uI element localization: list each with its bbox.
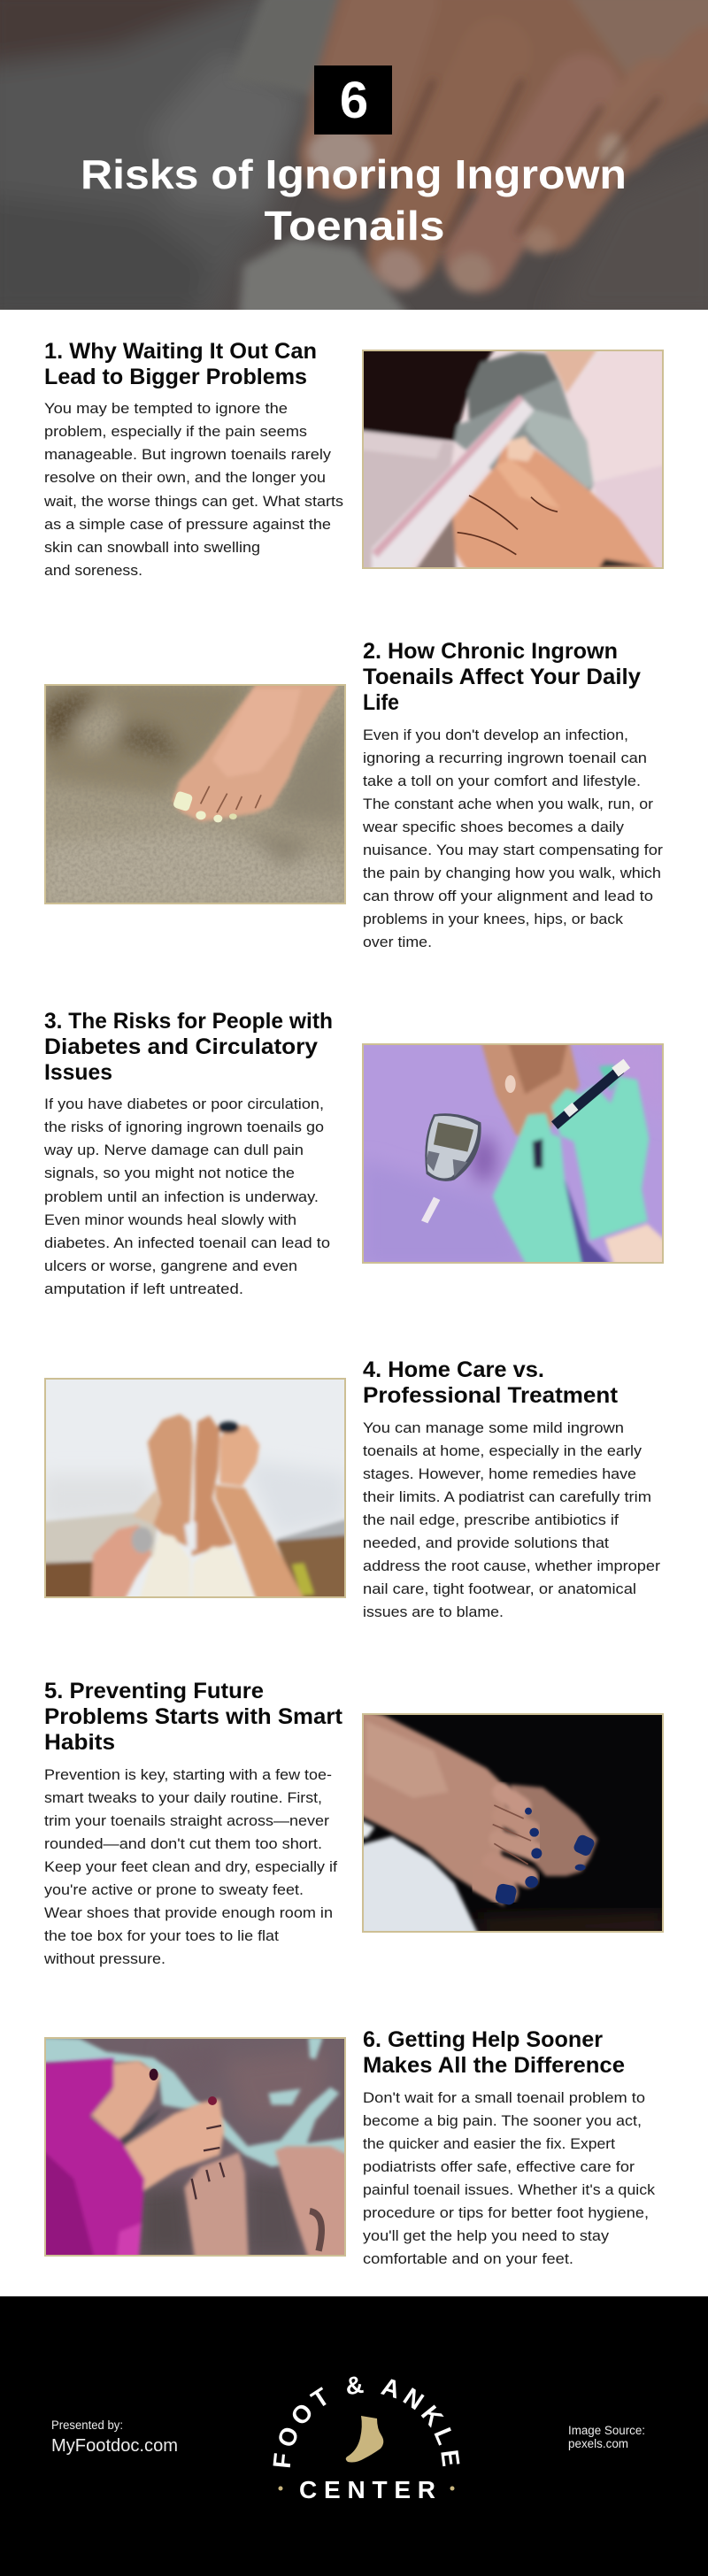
- heading 2: [363, 639, 641, 715]
- heading 5: Habits: [44, 1730, 115, 1755]
- text block 4: You can manage some mild ingrown: [363, 1420, 624, 1436]
- text block 4: [363, 1420, 661, 1620]
- text block 6: painful toenail issues. Whether it's a quick: [363, 2182, 656, 2198]
- heading 3: Diabetes and Circulatory: [44, 1034, 318, 1059]
- heading 6: [363, 2027, 625, 2078]
- text block 2: nuisance. You may start compensating for: [363, 842, 664, 858]
- photo: foot on sand: [44, 684, 346, 904]
- text block 5: rounded—and don't cut them too short.: [44, 1836, 322, 1852]
- title: [81, 151, 627, 249]
- heading 1: 1. Why Waiting It Out Can: [44, 339, 317, 364]
- text block 4: address the root cause, whether improper: [363, 1558, 661, 1574]
- text block 1: skin can snowball into swelling: [44, 540, 260, 556]
- presented by: MyFootdoc.com: [51, 2436, 178, 2456]
- text block 2: over time.: [363, 934, 432, 950]
- text block 1: problem, especially if the pain seems: [44, 424, 307, 440]
- panel: section 1: [43, 339, 666, 579]
- panel: section 6: [42, 2027, 656, 2267]
- text block 3: signals, so you might not notice the: [44, 1165, 295, 1181]
- text block 4: issues are to blame.: [363, 1604, 504, 1620]
- heading 6: 6. Getting Help Sooner: [363, 2027, 603, 2052]
- text block 3: way up. Nerve damage can dull pain: [43, 1142, 304, 1158]
- text block 6: become a big pain. The sooner you act,: [363, 2113, 642, 2129]
- photo: glucose meter and gloved hands: [362, 1043, 664, 1264]
- heading 5: [44, 1679, 343, 1755]
- text block 6: Don't wait for a small toenail problem to: [363, 2090, 645, 2106]
- text block 1: resolve on their own, and the longer you: [44, 470, 326, 486]
- presented by: Presented by:: [51, 2418, 123, 2432]
- text block 5: Keep your feet clean and dry, especially if: [44, 1859, 337, 1875]
- heading 4: Professional Treatment: [363, 1383, 619, 1408]
- logo: FOOT & ANKLE: [273, 2377, 460, 2467]
- text block 2: take a toll on your comfort and lifestyle.: [363, 773, 641, 789]
- panel: section 4: [42, 1357, 661, 1620]
- text block 2: problems in your knees, hips, or back: [363, 911, 624, 927]
- number badge: [314, 65, 392, 135]
- text block 6: podiatrists offer safe, effective care for: [363, 2159, 635, 2175]
- text block 3: diabetes. An infected toenail can lead to: [44, 1235, 330, 1251]
- text block 4: needed, and provide solutions that: [363, 1535, 609, 1551]
- image source: Image Source:: [568, 2424, 645, 2437]
- text block 2: Even if you don't develop an infection,: [363, 727, 628, 743]
- number badge: 6: [340, 72, 368, 129]
- text block 6: comfortable and on your feet.: [363, 2251, 573, 2267]
- image source: [568, 2424, 645, 2450]
- text block 2: The constant ache when you walk, run, or: [363, 796, 654, 812]
- footer: [0, 2296, 708, 2576]
- text block 5: you're active or prone to sweaty feet.: [44, 1882, 304, 1898]
- text block 2: the pain by changing how you walk, which: [363, 865, 661, 881]
- text block 5: the toe box for your toes to lie flat: [44, 1928, 279, 1944]
- text block 6: the quicker and easier the fix. Expert: [363, 2136, 615, 2152]
- text block 3: the risks of ignoring ingrown toenails go: [44, 1119, 324, 1135]
- text block 4: nail care, tight footwear, or anatomical: [363, 1581, 636, 1597]
- text block 2: [362, 727, 664, 950]
- image source: pexels.com: [568, 2437, 628, 2450]
- text block 6: [363, 2090, 656, 2267]
- heading 3: Issues: [44, 1060, 112, 1085]
- heading 2: Life: [363, 690, 399, 715]
- text block 4: the nail edge, prescribe antibiotics if: [363, 1512, 619, 1528]
- logo: [273, 2377, 460, 2503]
- heading 3: 3. The Risks for People with: [44, 1009, 333, 1034]
- logo: CENTER: [299, 2476, 435, 2503]
- photo: feet in beach foam: [44, 2037, 346, 2257]
- panel: section 5: [43, 1679, 666, 1967]
- heading 5: 5. Preventing Future: [44, 1679, 264, 1703]
- text block 1: as a simple case of pressure against the: [44, 517, 331, 533]
- photo: feet with blue nail polish: [362, 1713, 664, 1933]
- text block 1: wait, the worse things can get. What starts: [43, 494, 343, 510]
- text block 3: [43, 1096, 330, 1297]
- photo: nail file on toe: [362, 350, 664, 569]
- title: Risks of Ignoring Ingrown: [81, 151, 627, 197]
- text block 1: [43, 401, 343, 579]
- text block 6: you'll get the help you need to stay: [363, 2228, 610, 2244]
- heading 4: [363, 1357, 619, 1408]
- icon: foot: [346, 2416, 383, 2462]
- header banner: [0, 0, 708, 319]
- text block 5: Wear shoes that provide enough room in: [44, 1905, 333, 1921]
- title: Toenails: [264, 203, 444, 249]
- text block 5: smart tweaks to your daily routine. First,: [44, 1790, 322, 1806]
- text block 4: their limits. A podiatrist can carefully trim: [363, 1489, 651, 1505]
- text block 3: Even minor wounds heal slowly with: [44, 1212, 296, 1228]
- heading 2: Toenails Affect Your Daily: [363, 665, 641, 689]
- heading 3: [44, 1009, 333, 1085]
- photo: painting toenails on bed: [44, 1378, 346, 1598]
- text block 5: without pressure.: [43, 1951, 165, 1967]
- text block 5: Prevention is key, starting with a few toe-: [44, 1767, 332, 1783]
- text block 1: and soreness.: [44, 563, 142, 579]
- heading 1: Lead to Bigger Problems: [44, 365, 307, 389]
- text block 1: You may be tempted to ignore the: [44, 401, 288, 417]
- heading 6: Makes All the Difference: [363, 2053, 625, 2078]
- heading 4: 4. Home Care vs.: [363, 1357, 544, 1382]
- text block 1: manageable. But ingrown toenails rarely: [44, 447, 332, 463]
- text block 5: trim your toenails straight across—never: [44, 1813, 330, 1829]
- text block 3: problem until an infection is underway.: [44, 1189, 319, 1205]
- text block 2: ignoring a recurring ingrown toenail can: [363, 750, 647, 766]
- text block 4: toenails at home, especially in the early: [363, 1443, 643, 1459]
- text block 3: ulcers or worse, gangrene and even: [44, 1258, 297, 1274]
- panel: section 2: [42, 639, 664, 950]
- text block 2: wear specific shoes becomes a daily: [362, 819, 625, 835]
- heading 2: 2. How Chronic Ingrown: [363, 639, 618, 664]
- presented by: [51, 2418, 178, 2456]
- heading 5: Problems Starts with Smart: [44, 1704, 343, 1729]
- text block 3: amputation if left untreated.: [44, 1281, 243, 1297]
- text block 5: [43, 1767, 337, 1967]
- text block 6: procedure or tips for better foot hygiene,: [363, 2205, 649, 2221]
- text block 2: can throw off your alignment and lead to: [363, 888, 653, 904]
- text block 3: If you have diabetes or poor circulation,: [44, 1096, 324, 1112]
- panel: section 3: [43, 1009, 666, 1297]
- text block 4: stages. However, home remedies have: [363, 1466, 636, 1482]
- heading 1: [44, 339, 317, 389]
- header background photo: [0, 0, 708, 310]
